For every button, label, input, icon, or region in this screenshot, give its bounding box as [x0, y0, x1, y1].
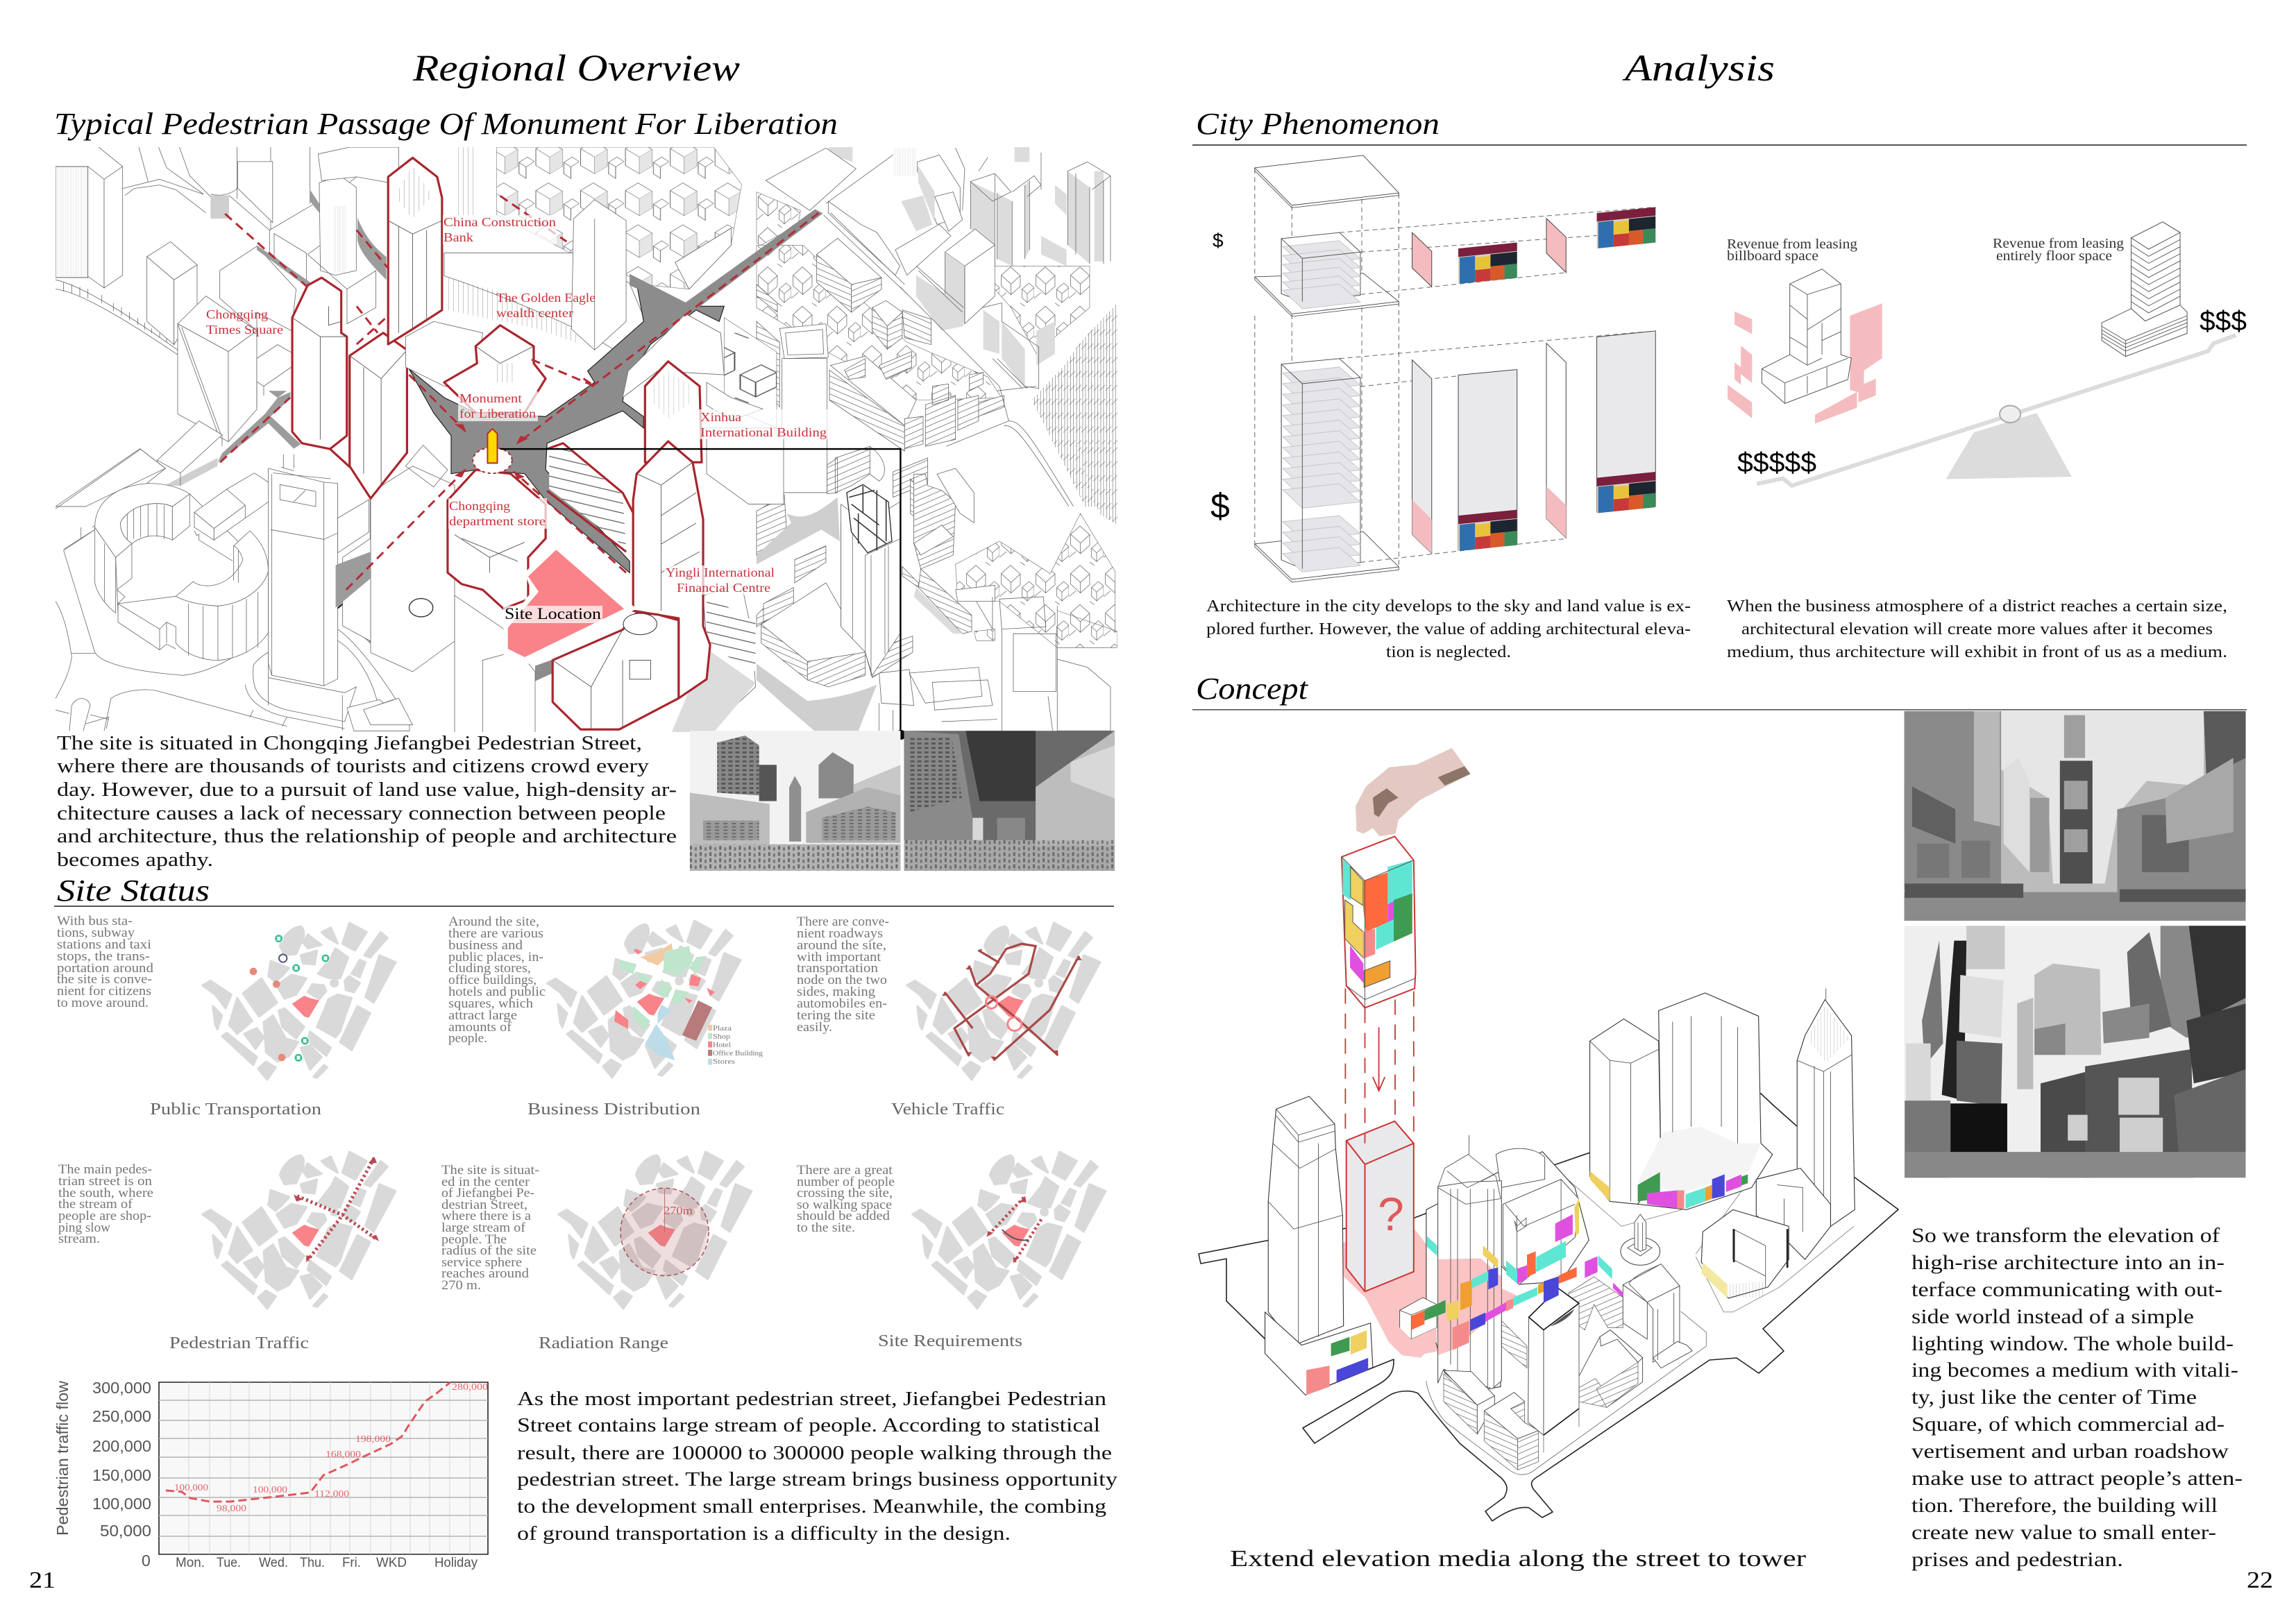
map panel: pedestrian traffic	[58, 1152, 396, 1352]
text: business note: Around the site,	[448, 915, 539, 929]
text: business note: office buildings,	[448, 973, 537, 987]
x axis labels	[176, 1556, 478, 1570]
text: business note: hotels and public	[448, 985, 546, 999]
revenue label: floor: Revenue from leasing	[1993, 236, 2124, 251]
revenue label: floor: entirely floor space	[1996, 248, 2112, 264]
revenue label: floor	[1993, 236, 2124, 264]
text: vehicle note: node on the two	[797, 973, 887, 987]
dense central blocks	[497, 147, 741, 289]
text: business note: public places, in-	[448, 950, 543, 965]
label backdrops	[443, 215, 829, 623]
y axis labels: 100,000	[92, 1495, 151, 1513]
caption: Site Requirements	[878, 1332, 1022, 1350]
text block: site description: becomes apathy.	[57, 849, 213, 871]
title: Analysis: Analysis	[1622, 47, 1775, 89]
text: radiation note: where there is a	[441, 1209, 532, 1223]
lower right city	[757, 444, 1117, 731]
text: transportation note: the site is conve-	[57, 972, 152, 987]
text: business note: squares, which	[448, 996, 534, 1011]
building labels: Bank	[444, 230, 473, 244]
text: transportation note: stops, the trans-	[57, 949, 150, 964]
site location	[504, 542, 636, 666]
building labels: Monument	[459, 391, 522, 405]
text block: concept explanation: ty, just like the center of Time	[1911, 1386, 2197, 1409]
billboard building	[1728, 303, 1882, 424]
y axis labels: 250,000	[92, 1407, 151, 1425]
stacked floor building	[2131, 222, 2180, 321]
right low buildings	[1701, 1169, 1830, 1298]
text: business atmosphere: medium, thus architecture will exhibit in front of us as a medium.	[1727, 643, 2227, 661]
pink plaza	[1326, 1229, 1517, 1357]
text: business atmosphere: When the business atmosphere of a district reaches a certain size,	[1727, 597, 2227, 615]
text: business note	[448, 915, 546, 1046]
caption: extend elevation media: Extend elevation media along the street to tower	[1230, 1546, 1807, 1572]
legend: Hotel	[713, 1041, 731, 1049]
text block: pedestrian stream: pedestrian street. The large stream brings business opportunity	[517, 1468, 1118, 1490]
hand	[1356, 748, 1470, 836]
y axis labels	[92, 1379, 151, 1570]
arrow down	[1373, 1027, 1385, 1091]
text: transportation note	[57, 914, 154, 1010]
text block: concept explanation: prises and pedestrian.	[1911, 1548, 2123, 1571]
text: requirements note: so walking space	[797, 1198, 892, 1212]
text block: site description	[57, 732, 677, 871]
building labels: China Construction	[444, 215, 556, 229]
text block: site description: chitecture causes a lack of necessary connection between people	[57, 802, 666, 824]
text: pedestrian note	[58, 1162, 153, 1246]
y axis labels: 200,000	[92, 1437, 151, 1455]
caption: Pedestrian Traffic	[169, 1334, 309, 1352]
floating media tower	[1342, 836, 1415, 1008]
text: requirements note: number of people	[797, 1175, 895, 1189]
value labels: 98,000	[217, 1503, 246, 1513]
building labels: department store	[449, 514, 546, 528]
lower box	[1281, 359, 1360, 569]
value labels: 280,000	[452, 1382, 488, 1392]
diagram: seesaw comparison	[1727, 222, 2247, 486]
x axis labels: Fri.	[342, 1556, 361, 1570]
text: radiation note: reaches around	[441, 1266, 530, 1281]
text: business note: cluding stores,	[448, 961, 531, 976]
map panel: public transportation	[57, 914, 396, 1119]
text: transportation note: stations and taxi	[57, 937, 151, 952]
text: vehicle note: sides, making	[797, 985, 876, 999]
x axis labels: Tue.	[217, 1556, 241, 1570]
text block: concept explanation: tion. Therefore, the building will	[1911, 1494, 2218, 1517]
text block: concept explanation: side world instead of a simple	[1911, 1305, 2194, 1328]
pink panels	[1412, 219, 1566, 287]
building labels: The Golden Eagle	[496, 291, 596, 305]
heading: Site Status: Site Status	[57, 874, 210, 908]
text: radiation note: people. The	[441, 1232, 507, 1247]
text: radiation note	[441, 1163, 539, 1293]
photo: Times Square billboards	[1905, 926, 2246, 1178]
caption: Business Distribution	[527, 1101, 700, 1119]
text: vehicle note: automobiles en-	[797, 996, 887, 1011]
upper right city	[757, 147, 1117, 507]
text: vehicle note: easily.	[797, 1020, 832, 1035]
text: radiation note: destrian Street,	[441, 1198, 527, 1212]
y axis labels: 0	[142, 1552, 151, 1570]
caption: Public Transportation	[150, 1101, 321, 1119]
text block: pedestrian stream: to the development small enterprises. Meanwhile, the combing	[517, 1495, 1106, 1518]
text: business note: business and	[448, 938, 523, 953]
text: business note: people.	[448, 1031, 487, 1046]
text: vehicle note	[797, 915, 889, 1035]
text: transportation note: With bus sta-	[57, 914, 133, 928]
text: requirements note	[797, 1163, 895, 1235]
ribbon colours	[1411, 1251, 1577, 1330]
chart: pedestrian traffic flow	[53, 1379, 488, 1570]
panel: aerial axonometric map	[56, 147, 1117, 740]
middle towers	[371, 445, 455, 672]
text block: concept explanation: terface communicating with out-	[1911, 1278, 2222, 1301]
text: pedestrian note: ping slow	[58, 1221, 110, 1235]
text: transportation note: portation around	[57, 961, 154, 976]
large dollar: $	[1210, 486, 1230, 525]
building labels: Site Location	[505, 605, 602, 622]
y axis labels: 300,000	[92, 1379, 151, 1397]
question mark: ?	[1378, 1188, 1404, 1241]
divider	[1192, 709, 2247, 711]
text block: concept explanation: make use to attract people’s atten-	[1911, 1467, 2243, 1490]
revenue label: billboard: Revenue from leasing	[1727, 237, 1857, 252]
text: transportation note: to move around.	[57, 996, 149, 1010]
left tower	[1265, 1096, 1373, 1395]
text block: concept explanation: vertisement and urban roadshow	[1911, 1440, 2229, 1463]
small dollar: $	[1213, 230, 1224, 251]
right crown tower	[1797, 989, 1855, 1226]
range label: 270m	[664, 1204, 693, 1217]
map panel: radiation range	[441, 1152, 752, 1352]
red dashed pedestrian routes	[220, 196, 818, 590]
text: radiation note: The site is situat-	[441, 1163, 539, 1178]
text: vehicle note: around the site,	[797, 938, 886, 953]
text block: pedestrian stream: result, there are 100000 to 300000 people walking through the	[517, 1442, 1112, 1464]
text: vehicle note: tering the site	[797, 1008, 875, 1023]
value labels: 168,000	[326, 1449, 361, 1459]
building labels	[206, 215, 827, 622]
building labels: for Liberation	[459, 407, 536, 420]
text: vehicle note: transportation	[797, 961, 879, 976]
text: radiation note: radius of the site	[441, 1243, 537, 1258]
center plaza building	[1426, 1148, 1589, 1392]
legend	[713, 1024, 763, 1066]
back towers	[1590, 993, 1773, 1209]
billboards	[1458, 243, 1517, 284]
red outlined landmark towers	[292, 278, 350, 467]
caption: Radiation Range	[539, 1334, 668, 1352]
page number 21: 21	[29, 1567, 56, 1593]
caption: Vehicle Traffic	[891, 1101, 1004, 1119]
left tower and curved bridge	[56, 147, 387, 507]
text: pedestrian note: the south, where	[58, 1186, 153, 1200]
text: transportation note: nient for citizens	[57, 984, 151, 999]
photo: street at night	[904, 731, 1115, 871]
building labels: Xinhua	[700, 410, 741, 424]
legend: Office Building	[713, 1049, 763, 1057]
data line	[166, 1382, 450, 1502]
low striped blocks	[1501, 1320, 1527, 1368]
text: business note: there are various	[448, 926, 543, 941]
dashed drop lines	[1345, 989, 1414, 1144]
x axis labels: Thu.	[300, 1556, 325, 1570]
text: business atmosphere: architectural elevation will create more values after it becomes	[1741, 620, 2213, 638]
text block: pedestrian stream	[517, 1388, 1118, 1545]
question-mark tower	[1347, 1121, 1414, 1291]
text: business note: attract large	[448, 1008, 517, 1023]
five dollars: $$$$$	[1737, 448, 1816, 478]
revenue label: billboard: billboard space	[1727, 248, 1818, 264]
text: vehicle note: There are conve-	[797, 915, 889, 929]
projection lines	[1340, 207, 1655, 562]
value labels: 198,000	[355, 1434, 391, 1444]
C-shaped building and plaza	[56, 449, 410, 731]
text: requirements note: to the site.	[797, 1221, 855, 1235]
heading: Typical Pedestrian Passage: Typical Pedestrian Passage Of Monument For Liberation	[54, 107, 838, 141]
text: radiation note: 270 m.	[441, 1278, 481, 1293]
text block: site description: day. However, due to a pursuit of land use value, high-density ar-	[57, 779, 677, 801]
text block: concept explanation	[1911, 1224, 2243, 1571]
value labels: 112,000	[314, 1488, 349, 1499]
building labels: International Building	[700, 425, 827, 439]
text: architecture develops: tion is neglected.	[1386, 643, 1511, 661]
text block: concept explanation: So we transform the elevation of	[1911, 1224, 2220, 1247]
diagram: tower and elevation exploded view	[1210, 155, 1655, 582]
text: architecture develops	[1206, 597, 1691, 661]
text block: site description: where there are thousands of tourists and citizens crowd every	[57, 755, 650, 777]
value labels: 100,000	[174, 1482, 208, 1493]
text block: concept explanation: high-rise architecture into an in-	[1911, 1251, 2225, 1274]
building labels: wealth center	[496, 306, 573, 320]
map panel: site requirements	[797, 1152, 1106, 1350]
text: radiation note: ed in the center	[441, 1175, 530, 1189]
text: requirements note: should be added	[797, 1209, 890, 1223]
upper box	[1281, 232, 1360, 302]
ground outline	[1199, 1094, 1898, 1521]
text: transportation note: tions, subway	[57, 926, 135, 940]
building labels: Financial Centre	[677, 581, 770, 595]
divider	[1192, 144, 2247, 146]
text: radiation note: of Jiefangbei Pe-	[441, 1186, 534, 1200]
value labels	[174, 1382, 488, 1513]
text: requirements note: There are a great	[797, 1163, 893, 1178]
text: business atmosphere	[1727, 597, 2227, 661]
heading: Concept: Concept	[1196, 672, 1309, 706]
text block: concept explanation: create new value to small enter-	[1911, 1521, 2216, 1544]
x axis labels: Holiday	[434, 1556, 478, 1570]
central district	[220, 147, 900, 733]
text: architecture develops: Architecture in the city develops to the sky and land value is ex-	[1206, 597, 1691, 615]
lower district and media ribbon	[1388, 1181, 1706, 1475]
heading: City Phenomenon: City Phenomenon	[1196, 107, 1440, 141]
x axis labels: Mon.	[176, 1556, 205, 1570]
building labels: Chongqing	[449, 499, 510, 513]
revenue label: billboard	[1727, 237, 1857, 264]
diagram: concept axonometric	[1199, 748, 1898, 1521]
text: pedestrian note: trian street is on	[58, 1174, 153, 1189]
legend: Stores	[713, 1057, 735, 1066]
text block: pedestrian stream: of ground transportation is a difficulty in the design.	[517, 1522, 1011, 1545]
building labels: Chongqing	[206, 307, 268, 321]
text: radiation note: service sphere	[441, 1255, 522, 1270]
text block: pedestrian stream: As the most important pedestrian street, Jiefangbei Pedestrian	[517, 1388, 1107, 1410]
plaza and roads	[409, 283, 724, 572]
text block: pedestrian stream: Street contains large stream of people. According to statistical	[517, 1414, 1100, 1436]
text: pedestrian note: people are shop-	[58, 1209, 151, 1223]
page number 22: 22	[2247, 1567, 2273, 1593]
text: architecture develops: plored further. However, the value of adding architectural eleva-	[1206, 620, 1691, 638]
text: business note: amounts of	[448, 1020, 512, 1035]
three dollars: $$$	[2200, 306, 2247, 337]
plaza tower	[1438, 1181, 1501, 1389]
title: Regional Overview: Regional Overview	[412, 47, 740, 89]
text: radiation note: large stream of	[441, 1221, 526, 1235]
divider	[54, 906, 1114, 907]
front tower	[1529, 1289, 1579, 1330]
y axis labels: 150,000	[92, 1466, 151, 1484]
text block: concept explanation: ing becomes a medium with vitali-	[1911, 1359, 2238, 1382]
monument	[473, 448, 512, 473]
text: pedestrian note: The main pedes-	[58, 1162, 152, 1177]
text: requirements note: crossing the site,	[797, 1186, 893, 1200]
y axis labels: 50,000	[100, 1522, 151, 1540]
building labels: Times Square	[206, 323, 283, 337]
text: pedestrian note: the stream of	[58, 1197, 133, 1212]
building labels: Yingli International	[666, 566, 775, 579]
value labels: 100,000	[253, 1484, 287, 1495]
photo: Jiefangbei plaza	[690, 731, 900, 871]
text: vehicle note: nient roadways	[797, 926, 883, 941]
text block: site description: and architecture, thus the relationship of people and architecture	[57, 825, 677, 847]
map panel: business distribution	[448, 915, 763, 1119]
map panel: vehicle traffic	[797, 915, 1100, 1119]
legend: Plaza	[713, 1024, 732, 1033]
text block: concept explanation: Square, of which commercial ad-	[1911, 1413, 2225, 1436]
x axis labels: WKD	[376, 1556, 407, 1570]
axis title: Pedestrian traffic flow	[53, 1381, 71, 1536]
text block: concept explanation: lighting window. The whole build-	[1911, 1332, 2234, 1355]
text: pedestrian note: stream.	[58, 1232, 100, 1246]
text: vehicle note: with important	[797, 950, 881, 965]
legend: Shop	[713, 1033, 731, 1041]
photo: Times Square street view	[1905, 711, 2246, 921]
leader dot	[896, 730, 906, 740]
text block: site description: The site is situated in Chongqing Jiefangbei Pedestrian Street,	[57, 732, 642, 754]
x axis labels: Wed.	[259, 1556, 288, 1570]
